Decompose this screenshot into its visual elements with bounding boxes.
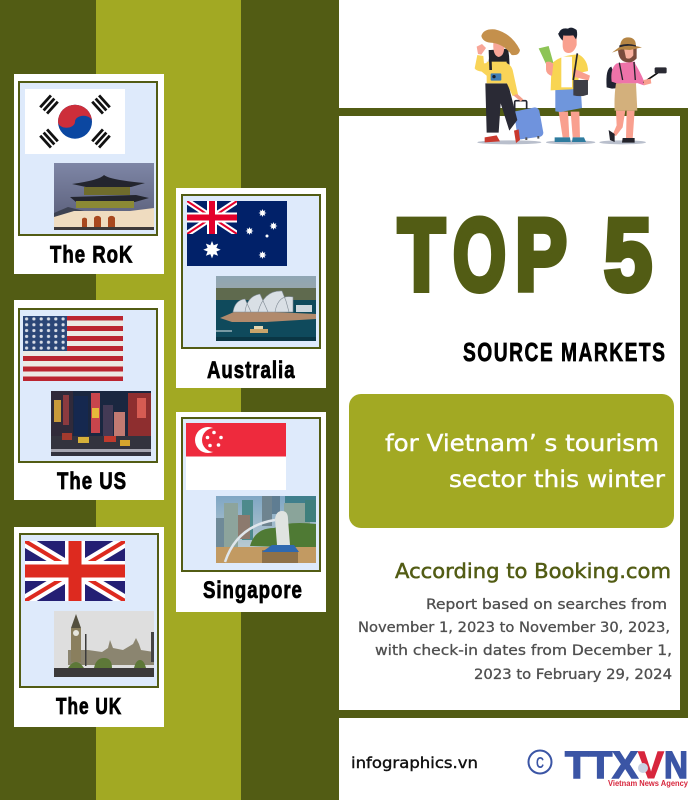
flag: United Kingdom — [25, 541, 125, 601]
flag: South Korea — [25, 89, 125, 154]
photo: Merlion Park — [216, 496, 316, 563]
label: The US — [57, 466, 127, 495]
photo: Times Square — [51, 391, 151, 456]
flag: Australia — [187, 201, 287, 266]
logo: TTXVN — [528, 745, 689, 788]
report note: November 1, 2023 to November 30, 2023, — [358, 620, 670, 636]
photo: Big Ben and Westminster — [54, 611, 154, 677]
report note — [358, 597, 672, 683]
label: Australia — [207, 355, 296, 384]
logo: TTXVN: Vietnam News Agency — [608, 779, 689, 788]
card: The US — [14, 300, 164, 500]
photo: Gyeongbokgung gate — [54, 163, 154, 230]
traveller: woman with selfie stick — [606, 37, 667, 143]
logo: TTXVN: TTX — [565, 745, 639, 787]
photo: Sydney Opera House — [216, 276, 316, 341]
report note: Report based on searches from — [426, 597, 667, 613]
traveller: man with map — [539, 28, 590, 142]
callout box: sector this winter — [449, 467, 666, 493]
report note: 2023 to February 29, 2024 — [474, 667, 672, 683]
traveller: woman with suitcase — [475, 29, 543, 143]
website footer: infographics.vn — [351, 754, 478, 772]
card: Australia — [176, 188, 326, 388]
source heading: According to Booking.com — [395, 559, 671, 583]
label: The RoK — [50, 240, 133, 268]
frame: main text panel — [339, 112, 684, 714]
title: TOP 5 — [398, 198, 652, 312]
ground shadows — [477, 140, 646, 144]
subtitle: source markets: SOURCE MARKETS — [463, 337, 666, 367]
callout box — [349, 394, 674, 528]
title: TOP 5: 5 — [604, 198, 652, 312]
logo: TTXVN: C — [536, 755, 544, 772]
flag: United States — [23, 316, 123, 381]
card: The RoK — [14, 74, 164, 274]
report note: with check-in dates from December 1, — [375, 643, 672, 659]
title: TOP 5: T — [398, 198, 445, 312]
label: Singapore — [203, 575, 303, 604]
title: TOP 5: O — [453, 198, 506, 312]
card: Singapore — [176, 412, 326, 612]
callout box: for Vietnam’ s tourism — [385, 431, 659, 457]
title: TOP 5: P — [515, 198, 567, 312]
flag: Singapore — [186, 423, 286, 490]
card: The UK — [14, 527, 164, 727]
logo: TTXVN: N — [664, 745, 688, 787]
label: The UK — [56, 695, 122, 720]
logo: TTXVN: V — [638, 745, 665, 787]
illustration: three travellers — [475, 28, 667, 144]
